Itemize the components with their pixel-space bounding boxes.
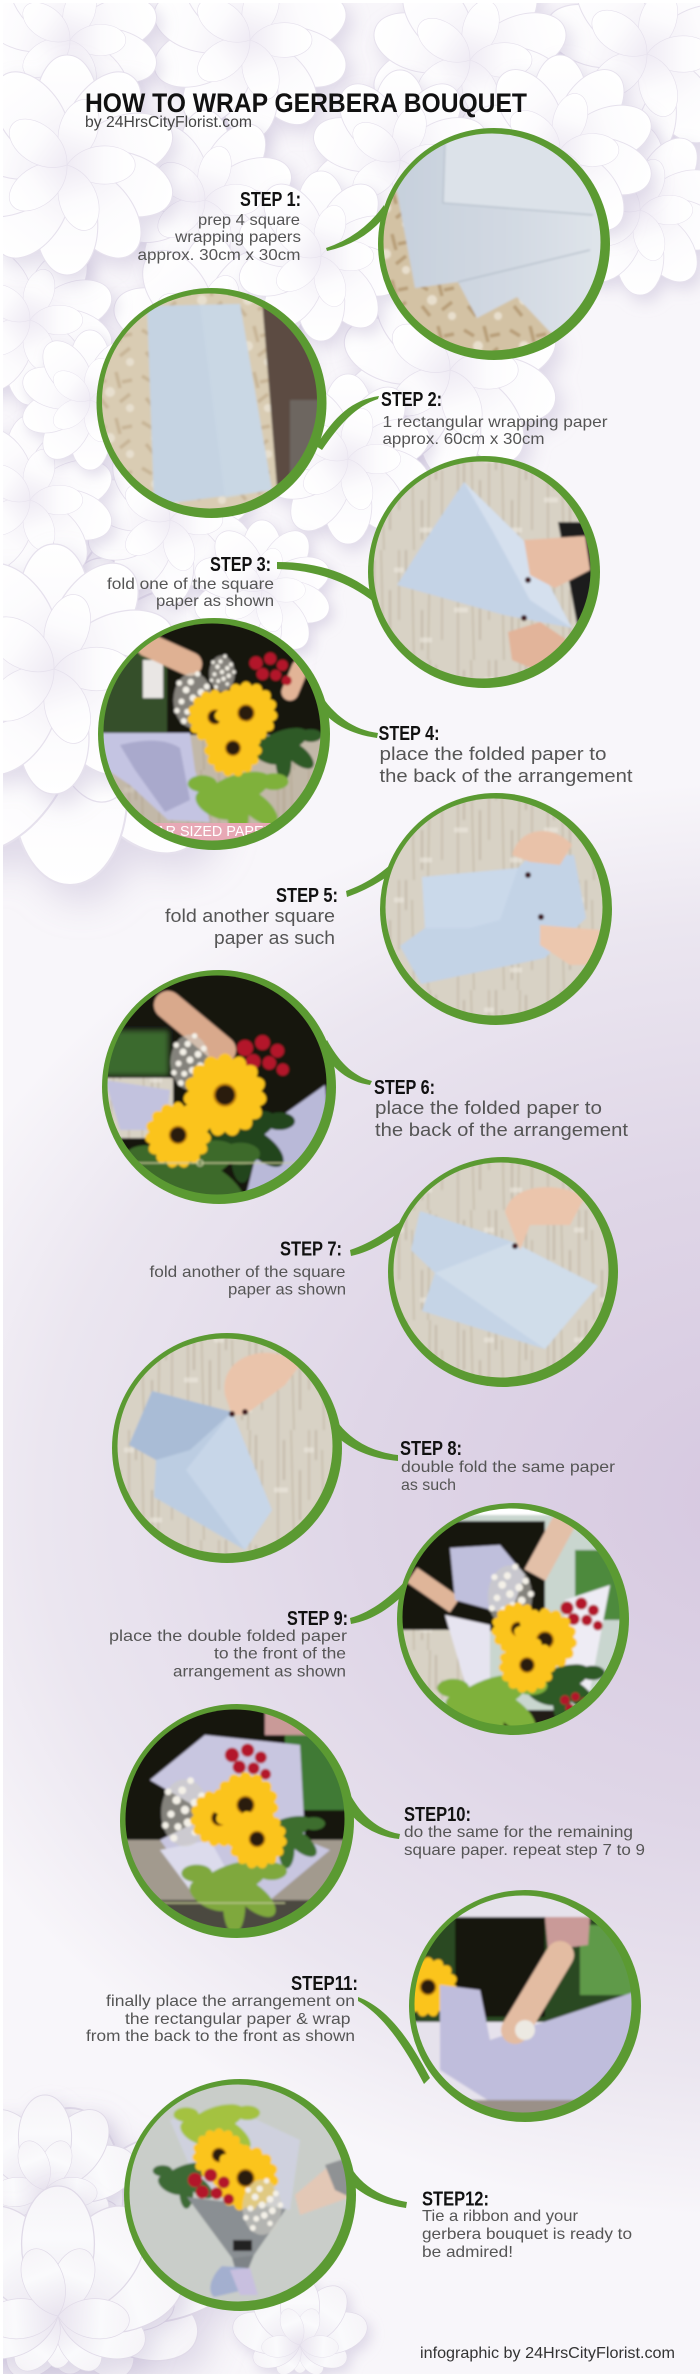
ring 2 bbox=[96, 288, 326, 518]
text 8 bbox=[401, 1459, 616, 1494]
subtitle: by 24HrsCityFlorist.com bbox=[85, 114, 252, 131]
heading 11: STEP11: bbox=[291, 1973, 358, 1995]
step 4 bbox=[97, 618, 632, 850]
text 1: wrapping papers bbox=[174, 229, 301, 246]
text 3: paper as shown bbox=[156, 593, 274, 610]
photo: square papers bbox=[384, 134, 600, 350]
heading 7: STEP 7: bbox=[280, 1238, 342, 1260]
text 12: Tie a ribbon and your bbox=[422, 2208, 579, 2225]
text 10 bbox=[404, 1824, 645, 1859]
connector 11 bbox=[358, 1997, 430, 2084]
text 1: prep 4 square bbox=[198, 212, 300, 229]
caption strip in photo: AR SIZED PAPER bbox=[156, 823, 274, 840]
ring 4 bbox=[98, 618, 330, 850]
step 12 bbox=[124, 2078, 632, 2311]
heading 1: STEP 1: bbox=[240, 189, 301, 211]
text 6 bbox=[375, 1098, 628, 1140]
step 5 bbox=[165, 793, 612, 1026]
ring 12 bbox=[124, 2079, 356, 2311]
step 8 bbox=[112, 1332, 616, 1564]
photo: wrapping bbox=[414, 1896, 632, 2112]
text 2: approx. 60cm x 30cm bbox=[382, 431, 544, 448]
photo: third fold bbox=[394, 1162, 608, 1378]
photo: paper at front bbox=[402, 1508, 620, 1726]
ring 3 bbox=[368, 456, 600, 688]
step 11 bbox=[86, 1890, 642, 2125]
connector 8 bbox=[331, 1420, 398, 1461]
ring 9 bbox=[397, 1503, 629, 1735]
text 10: do the same for the remaining bbox=[404, 1824, 633, 1841]
ring 10 bbox=[120, 1704, 354, 1938]
connector 7 bbox=[350, 1222, 402, 1256]
text 9: place the double folded paper bbox=[109, 1628, 348, 1645]
ring 6 bbox=[102, 970, 336, 1204]
text 9: to the front of the bbox=[214, 1646, 346, 1662]
photo: folding paper bbox=[374, 462, 590, 678]
text 4 bbox=[380, 744, 632, 786]
connector 6 bbox=[322, 1040, 372, 1085]
photo: repeat steps bbox=[126, 1710, 344, 1928]
step 10 bbox=[120, 1704, 645, 1940]
text 11: finally place the arrangement on bbox=[106, 1993, 355, 2010]
heading 10: STEP10: bbox=[404, 1804, 471, 1826]
text 2 bbox=[382, 414, 608, 448]
title: HOW TO WRAP GERBERA BOUQUET bbox=[85, 88, 527, 118]
text 5: paper as such bbox=[214, 928, 335, 948]
connector 2 bbox=[316, 396, 379, 450]
step 2 bbox=[96, 287, 608, 519]
heading 2: STEP 2: bbox=[381, 389, 442, 411]
text 1 bbox=[138, 212, 301, 264]
paper flowers: bottom cluster bbox=[0, 2095, 373, 2374]
connector 5 bbox=[346, 864, 392, 897]
heading 8: STEP 8: bbox=[400, 1438, 462, 1460]
text 11 bbox=[86, 1993, 355, 2045]
step 1 bbox=[138, 120, 620, 370]
photo: folded paper on arrangement bbox=[108, 976, 326, 1194]
heading 12: STEP12: bbox=[422, 2188, 489, 2210]
heading 4: STEP 4: bbox=[378, 723, 440, 745]
connector 9 bbox=[350, 1576, 412, 1624]
step 3 bbox=[107, 456, 600, 689]
heading 6: STEP 6: bbox=[374, 1077, 435, 1099]
connector 10 bbox=[341, 1788, 400, 1839]
text 2: 1 rectangular wrapping paper bbox=[382, 414, 608, 431]
text 8: as such bbox=[401, 1477, 456, 1494]
connector 4 bbox=[315, 692, 378, 738]
paper flowers: top cluster bbox=[0, 0, 700, 885]
ring 8 bbox=[112, 1333, 342, 1563]
photo: second fold bbox=[386, 798, 602, 1016]
text 5 bbox=[165, 906, 335, 948]
text 7: paper as shown bbox=[228, 1282, 346, 1298]
heading 9: STEP 9: bbox=[287, 1608, 348, 1630]
text 4: place the folded paper to bbox=[380, 744, 606, 764]
step 7 bbox=[150, 1157, 618, 1388]
photo: folded paper behind arrangement bbox=[104, 624, 320, 840]
step 9 bbox=[109, 1502, 629, 1750]
text 11: from the back to the front as shown bbox=[86, 2028, 355, 2045]
text 12 bbox=[422, 2208, 632, 2261]
text 7: fold another of the square bbox=[150, 1264, 346, 1281]
text 6: place the folded paper to bbox=[375, 1098, 602, 1118]
text 6: the back of the arrangement bbox=[375, 1120, 628, 1140]
text 9 bbox=[109, 1628, 348, 1680]
ring 11 bbox=[409, 1890, 641, 2122]
text 3 bbox=[107, 576, 274, 610]
connector 1 bbox=[326, 205, 386, 251]
connector 12 bbox=[344, 2166, 407, 2208]
connector 3 bbox=[277, 562, 378, 602]
ring 7 bbox=[388, 1157, 618, 1387]
ring 1 bbox=[378, 128, 610, 360]
heading 5: STEP 5: bbox=[276, 885, 338, 907]
photo: rectangular paper bbox=[102, 294, 317, 508]
footer credit: infographic by 24HrsCityFlorist.com bbox=[420, 2345, 675, 2362]
text 12: gerbera bouquet is ready to bbox=[422, 2226, 632, 2243]
text 5: fold another square bbox=[165, 906, 335, 926]
photo: finished bouquet bbox=[130, 2084, 346, 2302]
text 3: fold one of the square bbox=[107, 576, 274, 593]
heading 3: STEP 3: bbox=[210, 554, 271, 576]
text 8: double fold the same paper bbox=[401, 1459, 616, 1476]
text 7 bbox=[150, 1264, 346, 1298]
text 1: approx. 30cm x 30cm bbox=[138, 247, 300, 264]
text 9: arrangement as shown bbox=[173, 1664, 346, 1680]
photo: double fold bbox=[118, 1338, 332, 1554]
text 10: square paper. repeat step 7 to 9 bbox=[404, 1842, 645, 1859]
ring 5 bbox=[380, 793, 612, 1025]
step 6 bbox=[102, 970, 628, 1232]
text 4: the back of the arrangement bbox=[380, 766, 632, 786]
text 11: the rectangular paper & wrap bbox=[125, 2011, 351, 2028]
text 12: be admired! bbox=[422, 2244, 513, 2261]
